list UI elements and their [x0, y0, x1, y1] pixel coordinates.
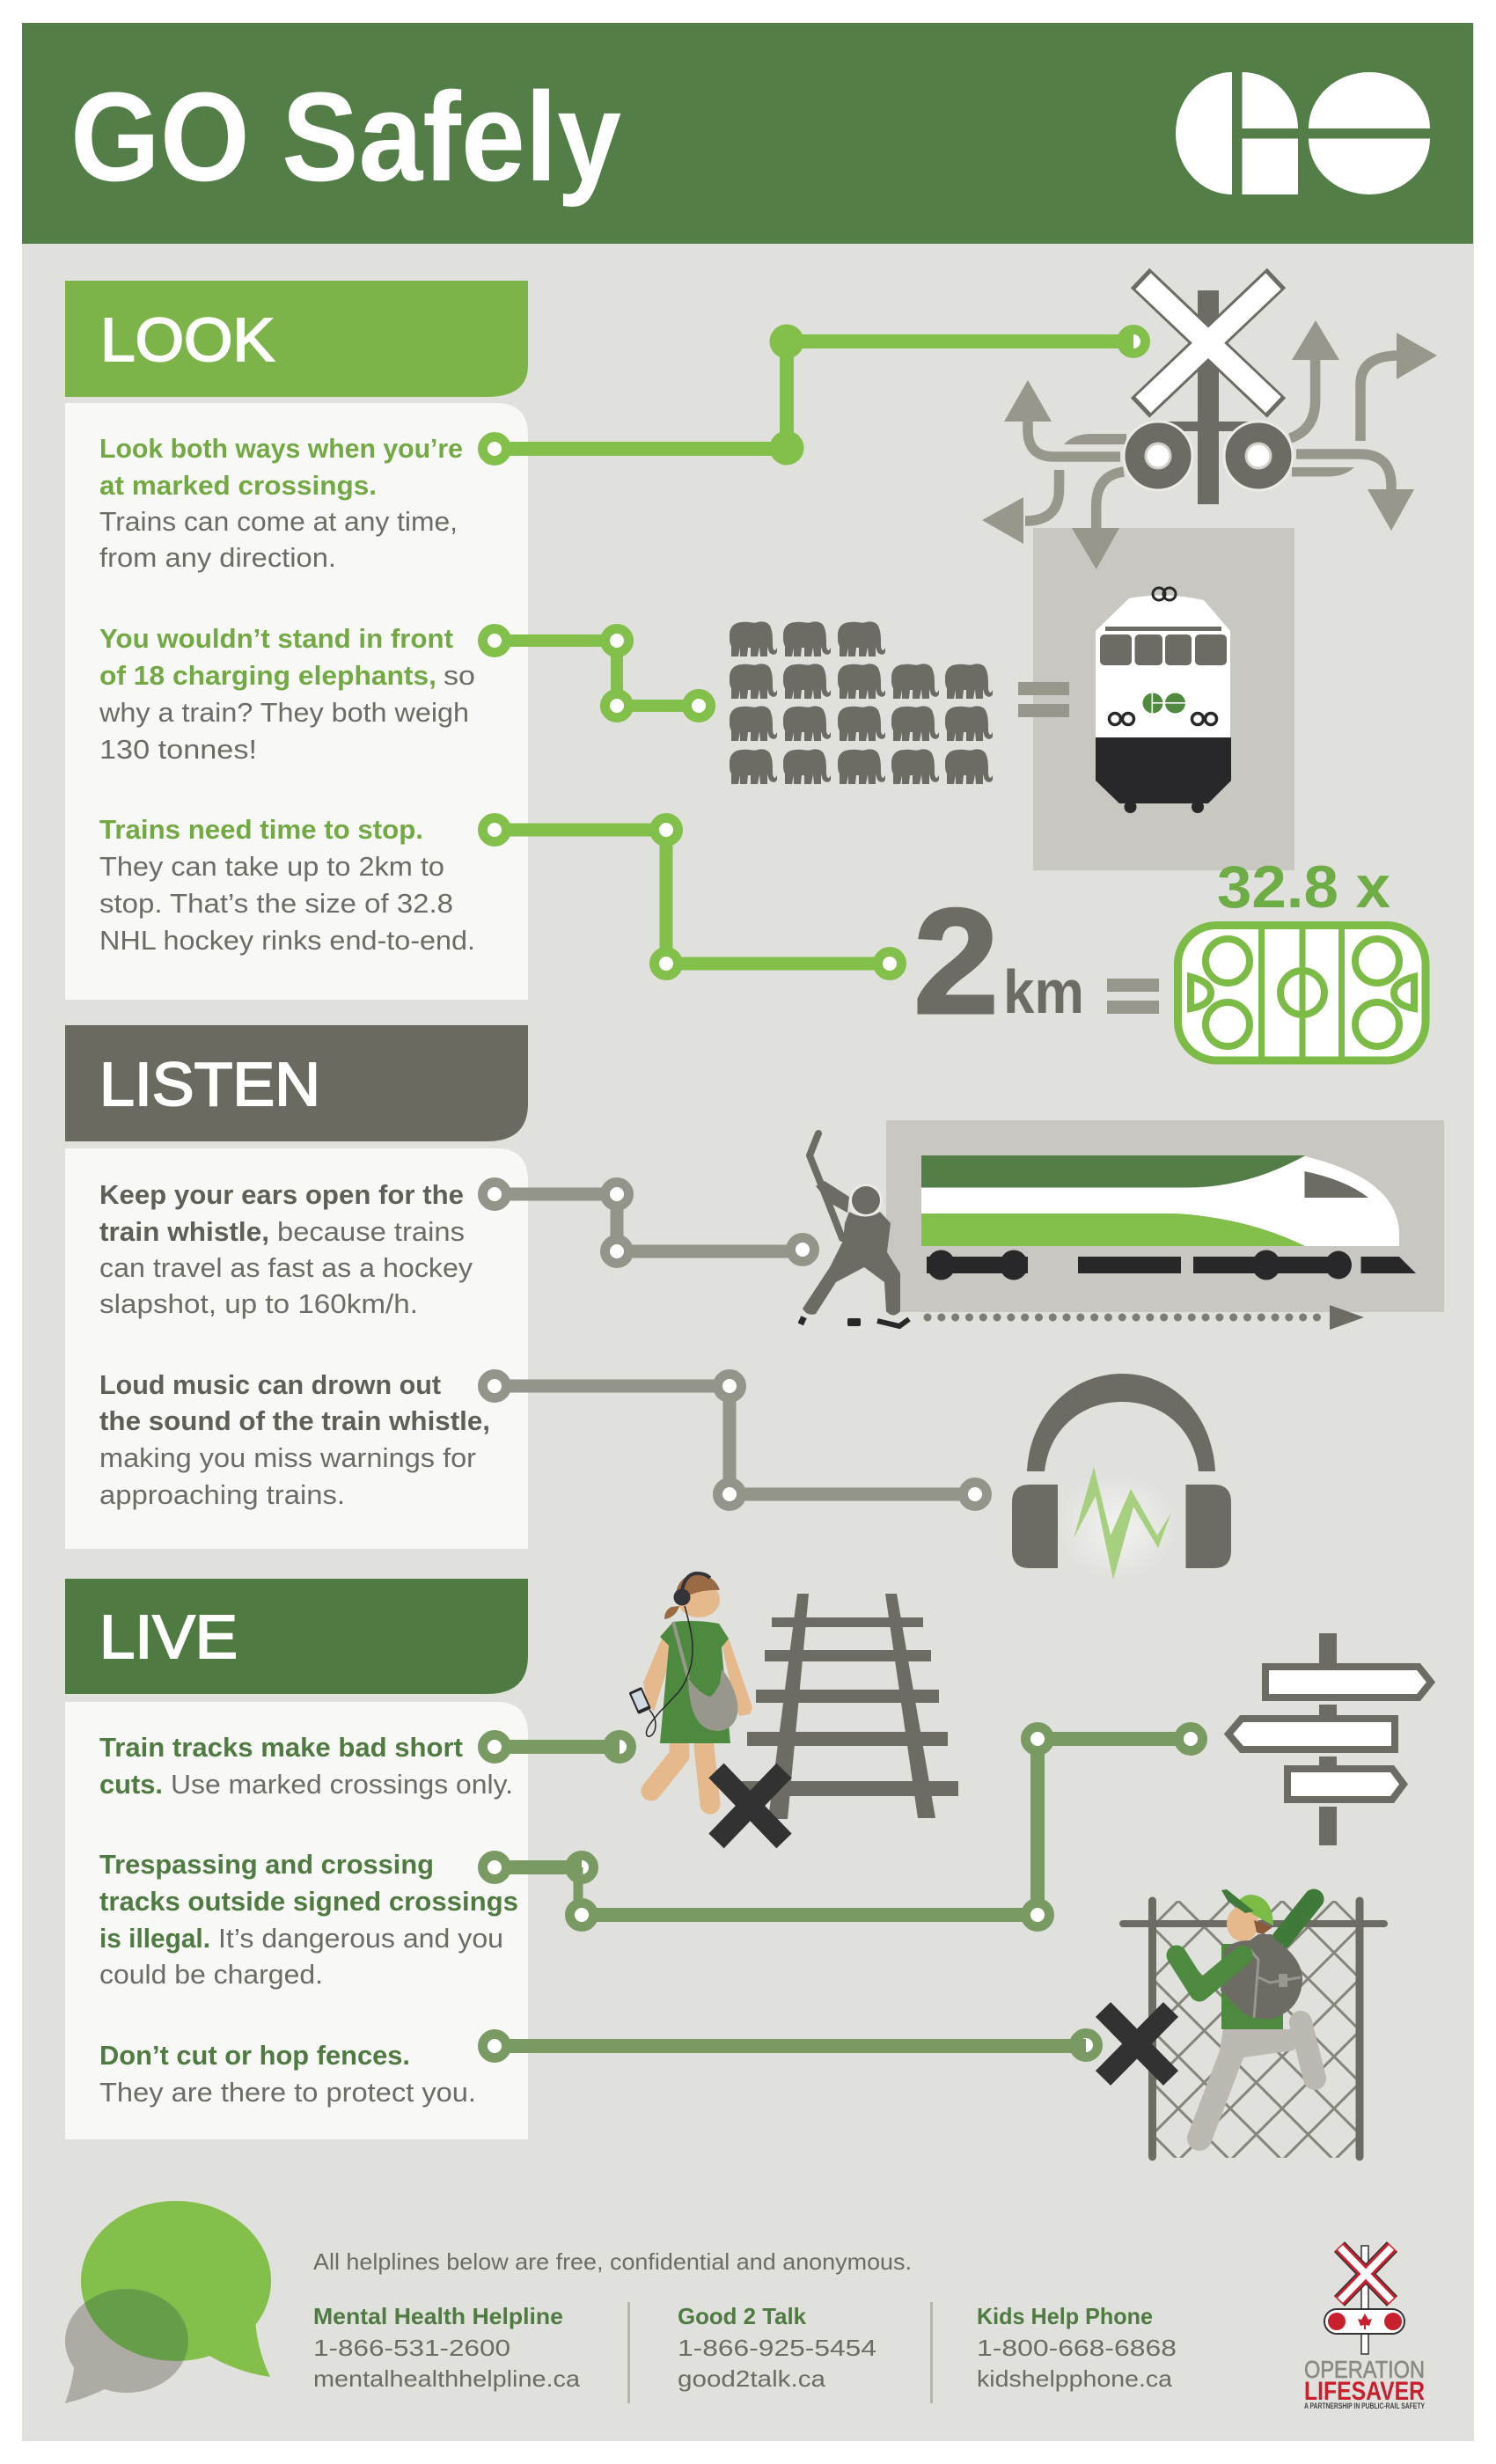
connector: look both ways to crossing	[482, 324, 1146, 465]
left leg	[1199, 2042, 1236, 2138]
backpack	[1221, 1934, 1302, 2019]
logo: Operation Lifesaver	[1304, 2246, 1425, 2410]
text: look both ways: at marked crossings.	[99, 470, 377, 501]
icon: X mark on tracks	[716, 1771, 784, 1841]
logo: Operation Lifesaver: LIFESAVER	[1304, 2377, 1425, 2406]
text: train whistle	[99, 1179, 473, 1319]
icon: hockey player	[798, 1133, 909, 1326]
LISTEN text card	[65, 1148, 528, 1549]
text: elephants: so	[444, 660, 475, 691]
torso	[1221, 1944, 1283, 2029]
cap	[1236, 1895, 1273, 1925]
icon: railway tracks	[737, 1594, 958, 1819]
text: trespassing: could be charged.	[99, 1959, 323, 1990]
text: fences: Don’t cut or hop fences.	[99, 2040, 410, 2071]
panel: LISTEN	[65, 1025, 528, 1549]
LISTEN heading bar	[65, 1025, 528, 1141]
helpline: Mental Health: 1-866-531-2600	[313, 2335, 510, 2361]
title: GO Safely	[70, 66, 621, 208]
icon: train front view	[1096, 588, 1231, 813]
text: time to stop: They can take up to 2km to	[99, 851, 444, 882]
text: look both ways: from any direction.	[99, 542, 336, 573]
helpline: Good 2 Talk: 1-866-925-5454	[678, 2335, 876, 2361]
text: train whistle: slapshot, up to 160km/h.	[99, 1288, 418, 1319]
left arm	[1177, 1955, 1243, 1991]
text: train whistle: can travel as fast as a hockey	[99, 1252, 473, 1283]
text: loud music: the sound of the train whistle,	[99, 1405, 490, 1436]
icon: woman with headphones	[628, 1573, 752, 1804]
text: train whistle: Keep your ears open for the	[99, 1179, 464, 1210]
header band	[22, 23, 1473, 244]
panel: LOOK	[65, 281, 528, 1000]
icon: dotted speed arrow	[928, 1305, 1364, 1330]
legs	[651, 1747, 679, 1791]
text: loud music: making you miss warnings for	[99, 1442, 476, 1473]
icon: X mark on fence	[1104, 2010, 1170, 2079]
grey backdrop: train front	[1033, 528, 1294, 870]
connector: elephants	[482, 628, 711, 718]
text: trespassing: is illegal.	[99, 1923, 210, 1954]
arrowhead over backdrop	[1072, 528, 1119, 569]
text: trespassing: It’s dangerous and you	[218, 1923, 503, 1954]
text: elephants: You wouldn’t stand in front	[99, 623, 453, 654]
panel: LIVE	[65, 1579, 528, 2139]
icon: GO train side view	[921, 1155, 1416, 1280]
earphone wire	[646, 1606, 693, 1736]
text: train whistle: train whistle,	[99, 1216, 269, 1247]
grey backdrop: side-view train	[886, 1120, 1444, 1312]
helpline: Good 2 Talk	[678, 2303, 876, 2392]
text: trespassing: tracks outside signed crossings	[99, 1886, 518, 1917]
text: time to stop	[99, 814, 475, 956]
LISTEN heading: LISTEN	[99, 1050, 320, 1118]
dress	[660, 1621, 730, 1743]
right leg	[1301, 2022, 1315, 2079]
LIVE text card	[65, 1702, 528, 2139]
text: short cuts: Use marked crossings only.	[171, 1769, 513, 1800]
helpline: Kids Help Phone: 1-800-668-6868	[977, 2335, 1177, 2361]
helpline: Good 2 Talk: Good 2 Talk	[678, 2303, 807, 2329]
text: loud music: Loud music can drown out	[99, 1369, 441, 1400]
text: elephants: of 18 charging elephants,	[99, 660, 436, 691]
GO logo	[1176, 72, 1430, 194]
icon: direction arrows around crossing	[982, 320, 1437, 544]
text: helplines intro: All helplines below are free, confidential and anonymous.	[313, 2248, 912, 2275]
text: look both ways	[99, 433, 463, 573]
text: short cuts: cuts.	[99, 1769, 163, 1800]
helpline: Kids Help Phone	[977, 2303, 1177, 2392]
label: 32.8 x: 32.8 x	[1217, 854, 1390, 920]
text: fences	[99, 2040, 476, 2108]
logo: Operation Lifesaver: A PARTNERSHIP IN PUBLIC-RAIL SAFETY	[1304, 2402, 1425, 2410]
helpline: Good 2 Talk: good2talk.ca	[678, 2365, 826, 2392]
icon: hockey rink	[1177, 926, 1426, 1060]
text: train whistle: because trains	[277, 1216, 465, 1247]
text: look both ways: Trains can come at any time,	[99, 506, 458, 537]
icon: man climbing fence	[1177, 1889, 1315, 2138]
text: trespassing: Trespassing and crossing	[99, 1849, 434, 1880]
icon: equals sign	[1107, 979, 1159, 1014]
helpline: Mental Health: Mental Health Helpline	[313, 2303, 563, 2329]
text: fences: They are there to protect you.	[99, 2077, 476, 2108]
helpline: Mental Health	[313, 2303, 581, 2392]
head	[678, 1582, 720, 1617]
connector: stopping distance	[482, 818, 901, 975]
connector: train whistle	[482, 1183, 815, 1264]
text: elephants: 130 tonnes!	[99, 734, 257, 765]
text: elephants	[99, 623, 475, 765]
hips	[1219, 2024, 1309, 2057]
LOOK text card	[65, 403, 528, 1000]
connector: trespassing to signs	[482, 1727, 1202, 1927]
raised arm	[1282, 1899, 1314, 1939]
LOOK heading: LOOK	[100, 305, 275, 374]
LOOK heading bar	[65, 281, 528, 397]
icon: direction signs	[1228, 1633, 1431, 1845]
icon: elephants (18)	[730, 621, 993, 784]
text: elephants: why a train? They both weigh	[99, 697, 469, 728]
phone	[628, 1687, 651, 1714]
big number: 2km	[913, 878, 1084, 1045]
LIVE heading: LIVE	[99, 1602, 238, 1671]
GO logo on train	[1142, 693, 1186, 714]
big number: 2km: 2	[913, 878, 999, 1045]
helpline: Mental Health: mentalhealthhelpline.ca	[313, 2365, 581, 2392]
head	[1227, 1906, 1258, 1941]
icon: speech bubbles	[65, 2201, 271, 2403]
icon: chain-link fence	[1123, 1901, 1384, 2158]
text: time to stop: stop. That’s the size of 32.8	[99, 888, 453, 919]
text: time to stop: Trains need time to stop.	[99, 814, 423, 845]
helpline: Kids Help Phone: kidshelpphone.ca	[977, 2365, 1173, 2392]
icon: headphones with sound wave	[1012, 1374, 1231, 1581]
text: time to stop: NHL hockey rinks end-to-end.	[99, 925, 475, 956]
arms	[643, 1639, 669, 1712]
connector: fences	[482, 2033, 1098, 2057]
text: trespassing	[99, 1849, 518, 1990]
connector: loud music	[482, 1375, 987, 1507]
icon: railway crossing sign	[1124, 278, 1293, 504]
bag	[688, 1669, 737, 1731]
text: short cuts: Train tracks make bad short	[99, 1732, 463, 1763]
text: loud music: approaching trains.	[99, 1479, 345, 1510]
helpline: Kids Help Phone: Kids Help Phone	[977, 2303, 1153, 2329]
text: loud music	[99, 1369, 490, 1510]
text: short cuts	[99, 1732, 513, 1800]
LIVE heading bar	[65, 1579, 528, 1694]
logo: Operation Lifesaver: OPERATION	[1304, 2356, 1425, 2383]
icon: equals sign	[1018, 682, 1069, 717]
big number: 2km: km	[1003, 957, 1084, 1026]
connector: short cuts	[482, 1735, 632, 1758]
text: look both ways: Look both ways when you’re	[99, 433, 463, 464]
